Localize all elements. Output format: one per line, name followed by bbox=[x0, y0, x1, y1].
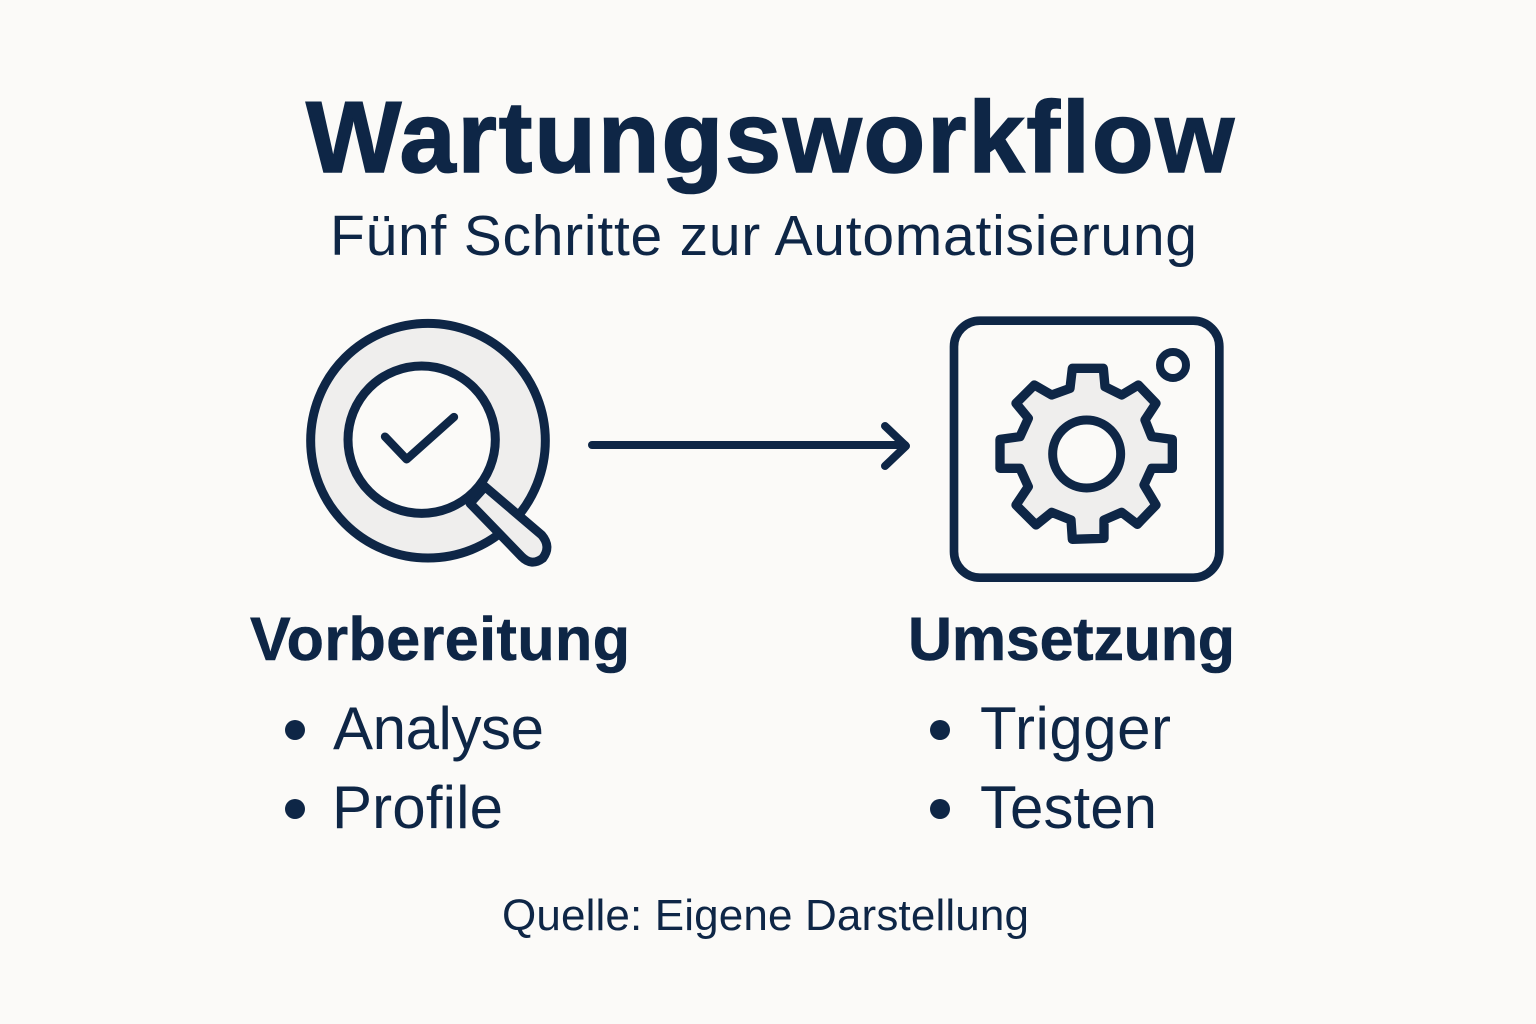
list: Umsetzung bbox=[930, 695, 1171, 841]
list: Vorbereitung: Profile bbox=[332, 774, 503, 841]
title: Wartungsworkflow bbox=[306, 82, 1234, 194]
subtitle: Fünf Schritte zur Automatisierung bbox=[330, 204, 1197, 268]
arrow bbox=[592, 426, 906, 466]
icon: gear in rounded square bbox=[954, 321, 1219, 578]
list: Umsetzung: Testen bbox=[980, 774, 1157, 841]
list: Vorbereitung: Analyse bbox=[333, 695, 544, 762]
source note: Quelle: Eigene Darstellung bbox=[502, 891, 1029, 940]
list: Vorbereitung bbox=[285, 695, 544, 841]
list: Umsetzung: Trigger bbox=[980, 695, 1171, 762]
icon: magnifying glass with check mark bbox=[311, 323, 547, 562]
heading: Umsetzung: Umsetzung bbox=[908, 605, 1235, 673]
heading: Vorbereitung: Vorbereitung bbox=[250, 605, 630, 673]
